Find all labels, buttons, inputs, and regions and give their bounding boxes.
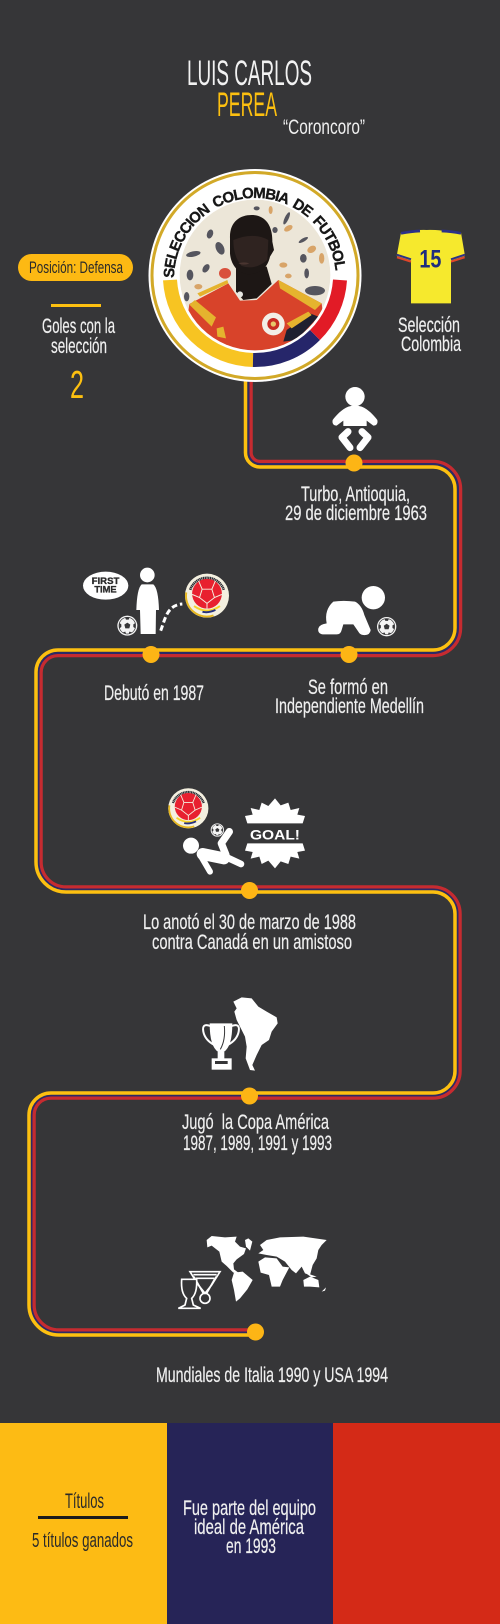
panel: ideal team: en 1993 [226, 1535, 276, 1558]
kicker [183, 832, 241, 872]
text: youth team: Se formó en [308, 676, 388, 699]
panel: ideal team: Fue parte del equipo [183, 1497, 316, 1520]
text: birth: 29 de diciembre 1963 [285, 502, 427, 525]
panel: titles: 5 títulos ganados [32, 1530, 133, 1552]
goals with the national team [42, 304, 115, 407]
text: debut: Debutó en 1987 [104, 682, 204, 705]
crest [185, 574, 229, 618]
icon: crawling baby [318, 586, 396, 636]
text: Copa America: 1987, 1989, 1991 y 1993 [183, 1132, 332, 1155]
medal [190, 1272, 220, 1303]
position pill: Posición: Defensa [29, 258, 123, 277]
panel: ideal team: ideal de América [194, 1516, 304, 1539]
map [233, 997, 278, 1071]
colour bands [170, 280, 340, 360]
icon: first time debut [83, 568, 229, 636]
marker: Copa America [241, 1088, 258, 1104]
icon: baby [332, 387, 377, 448]
goals with the national team: Goles con la [42, 315, 115, 338]
photo [177, 200, 333, 360]
text: Copa America: Jugó la Copa América [182, 1111, 329, 1134]
marker: debut [142, 646, 160, 663]
badge: player portrait [148, 169, 362, 382]
trophy [203, 1023, 239, 1070]
icon: goal [168, 788, 305, 872]
position pill [18, 254, 133, 281]
marker: world cups [247, 1324, 264, 1340]
title [187, 54, 365, 139]
text: youth team [275, 676, 424, 718]
text: goal [143, 911, 356, 954]
icon: jersey [397, 230, 465, 303]
jersey label [398, 314, 461, 356]
dashed kick [161, 604, 182, 631]
panel: titles: Títulos [65, 1490, 104, 1513]
text ring: SELECCION COLOMBIA DE FUTBOL [164, 187, 346, 278]
person [136, 568, 159, 634]
text: goal: Lo anotó el 30 de marzo de 1988 [143, 911, 356, 934]
speech bubble: FIRST [92, 576, 120, 586]
text: birth [285, 483, 427, 525]
speech bubble: TIME [94, 585, 117, 595]
cup [178, 1279, 201, 1308]
icon: trophy and South America [203, 997, 278, 1071]
world map [207, 1236, 327, 1302]
marker: youth team [340, 646, 358, 663]
marker: goal [241, 882, 258, 899]
panel: ideal team [167, 1423, 333, 1624]
marker: birth [346, 454, 362, 472]
head [230, 215, 274, 274]
panel: titles [0, 1423, 167, 1624]
speech bubble [83, 572, 128, 600]
goals with the national team: 2 [70, 364, 84, 407]
neck [236, 267, 272, 300]
ball [117, 616, 137, 636]
title: “Coroncoro” [283, 116, 365, 139]
text: youth team: Independiente Medellín [275, 695, 424, 718]
title: PEREA [217, 86, 277, 124]
text: Copa America [182, 1111, 332, 1155]
icon: jersey: 15 [419, 246, 441, 274]
timeline path [29, 378, 460, 1335]
goals with the national team: selección [51, 335, 107, 358]
icon: world map, cup and medal [178, 1236, 327, 1308]
panel: red block [333, 1423, 500, 1624]
text: world cups: Mundiales de Italia 1990 y USA 1994 [156, 1364, 388, 1387]
text: goal: contra Canadá en un amistoso [152, 931, 352, 954]
emblem [262, 313, 285, 335]
title: LUIS CARLOS [187, 54, 312, 93]
goal burst: GOAL! [250, 827, 300, 843]
text: birth: Turbo, Antioquia, [301, 483, 410, 506]
shirt [188, 280, 322, 350]
jersey label: Colombia [401, 333, 461, 356]
jersey label: Selección [398, 314, 460, 337]
